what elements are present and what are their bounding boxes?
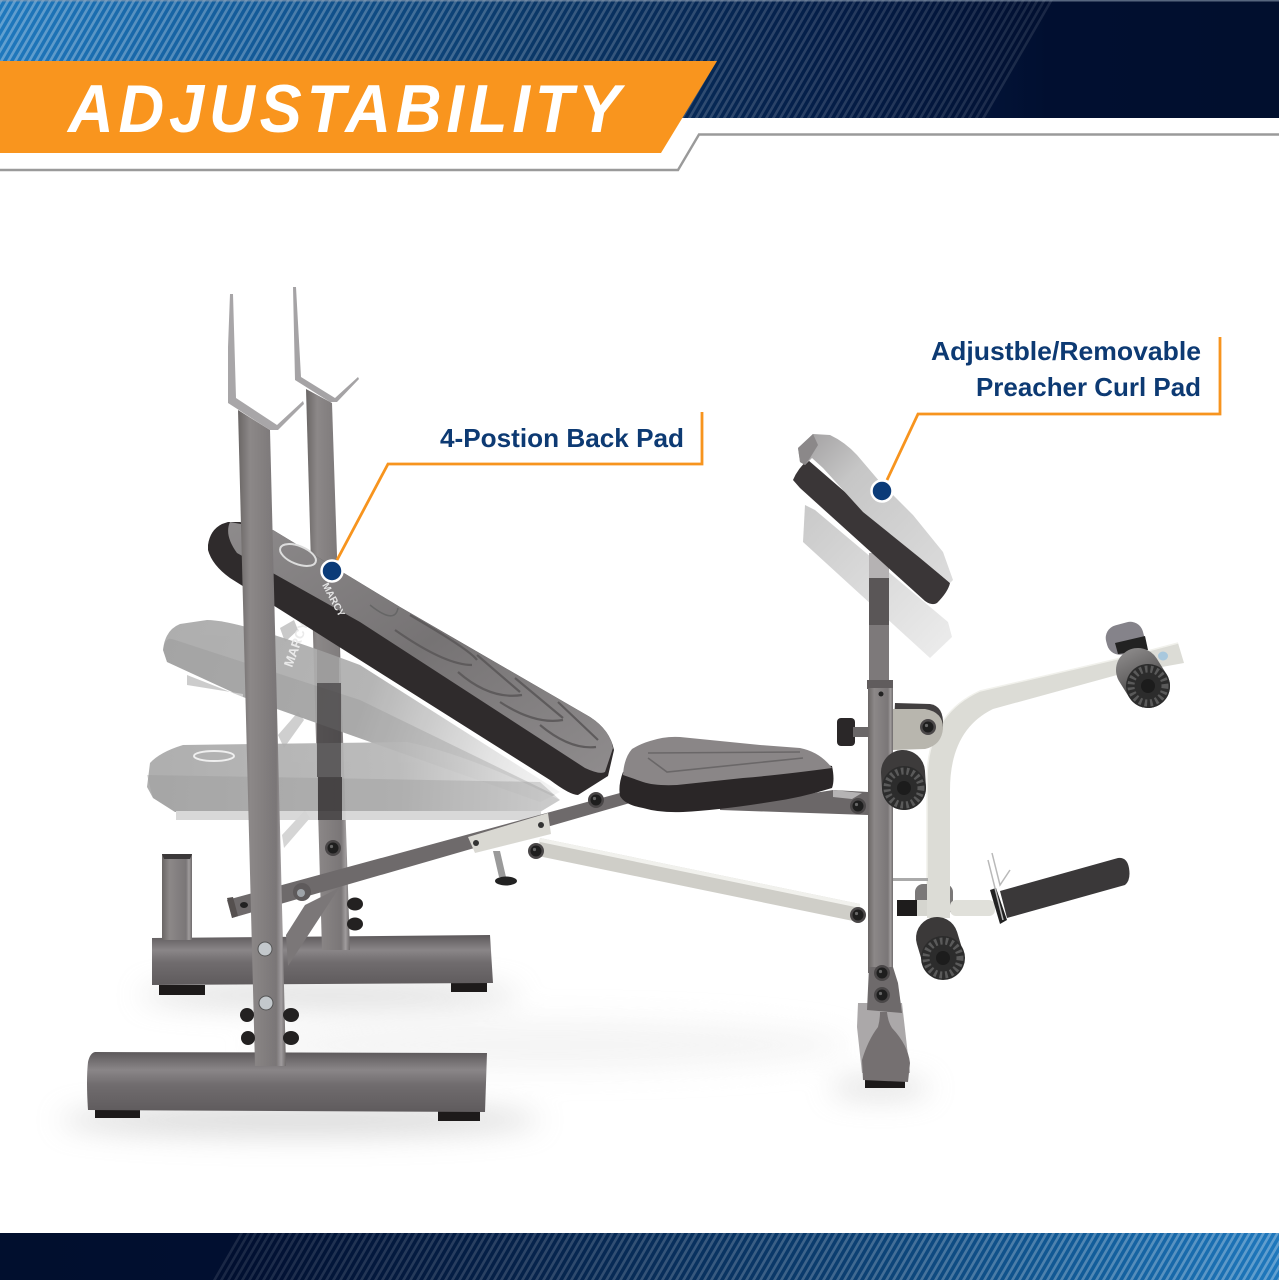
white rear supports (278, 620, 310, 848)
bottom bolt on right upright (850, 878, 928, 923)
rear upright seen through ghost pads (317, 640, 342, 820)
marker dot (322, 560, 342, 582)
upright bolts (240, 942, 299, 1045)
bench illustration (87, 287, 1184, 1121)
rear upright with fork (293, 287, 363, 950)
front upright with fork (228, 294, 304, 1066)
right upright (867, 553, 893, 973)
upper front roller (1126, 664, 1170, 708)
marker dot (872, 480, 892, 502)
ghost back pad: raised: MARCY (281, 619, 311, 669)
incline bar (227, 792, 630, 918)
right foot (857, 965, 910, 1088)
lower white support bar (528, 838, 860, 922)
footer band (0, 1233, 1279, 1280)
ghost back pad: flat (147, 742, 560, 820)
leader line (337, 412, 702, 560)
ghost curl pad (803, 505, 952, 658)
diagonal brace and pivot (286, 883, 339, 966)
back pad (raised, dark) (208, 522, 614, 795)
white header cut-out and grey rule (0, 118, 1279, 170)
seat pad (619, 737, 834, 812)
leader line (887, 337, 1220, 480)
curl pad (dark) (793, 434, 953, 604)
mid roller (882, 766, 926, 810)
adjuster pin (493, 851, 517, 886)
label: 4-Postion Back Pad (440, 423, 684, 453)
header band (0, 0, 1279, 118)
lower roller (921, 936, 965, 980)
floor shadow (60, 981, 930, 1136)
back pad (raised, dark): MARCY (319, 581, 346, 619)
title: ADJUSTABILITY (66, 71, 625, 146)
upper rear roller (1103, 619, 1148, 658)
front stabiliser base (87, 1052, 487, 1121)
label: Adjustble/Removable (931, 336, 1201, 366)
white leg lever (927, 643, 1184, 916)
ghost back pad: raised (163, 619, 560, 802)
pop pin knob (837, 718, 868, 746)
label: Preacher Curl Pad (976, 372, 1201, 402)
callout: preacher curl pad (872, 336, 1220, 502)
label (931, 336, 1201, 402)
title banner (0, 61, 717, 153)
pivot bracket (893, 703, 943, 750)
rear stabiliser base (152, 854, 493, 995)
seat frame (720, 790, 868, 815)
callout: back pad (322, 412, 702, 582)
lower lever tube and grip (897, 853, 1130, 924)
